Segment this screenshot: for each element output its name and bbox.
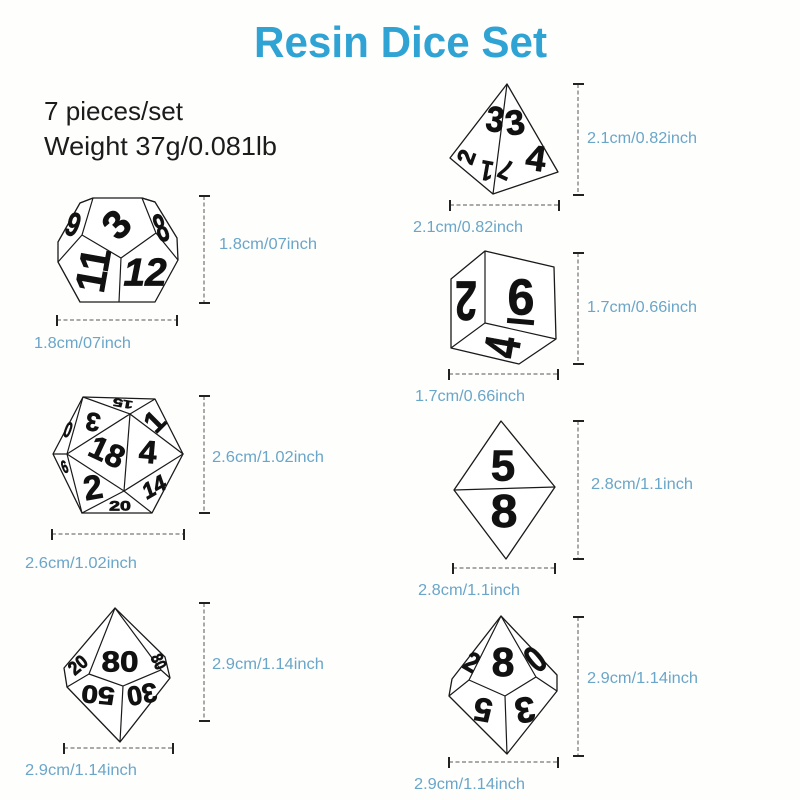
die: d10: 0 [516, 639, 556, 681]
die: d20: 18 [83, 428, 131, 476]
dimension: d10 percentile height [199, 603, 324, 721]
die: d10: 2 [458, 645, 486, 679]
dimension: d10 percentile width [25, 743, 173, 779]
dimension: d8 height [573, 421, 693, 559]
die: d20: 14 [137, 470, 171, 504]
die: d20: 2 [80, 468, 106, 508]
dimension: d20 width: 2.6cm/1.02inch [25, 555, 137, 572]
title: Resin Dice Set [254, 18, 547, 67]
dimension: d10 percentile width: 2.9cm/1.14inch [25, 762, 137, 779]
die: d8: 5 [491, 442, 515, 490]
die: d10 percentile: 80 [101, 646, 139, 678]
dimension: d10 percentile height: 2.9cm/1.14inch [212, 656, 324, 673]
die: d8 [454, 421, 555, 559]
die: d6: 2 [455, 269, 477, 331]
die: d4 [450, 84, 558, 194]
dimension: d10 height [573, 617, 698, 756]
dimension: d10 width [414, 757, 558, 793]
die: d4: 2 [452, 146, 482, 168]
dimension: d20 height: 2.6cm/1.02inch [212, 449, 324, 466]
dimension: d6 height [573, 253, 697, 364]
dimension: d10 width: 2.9cm/1.14inch [414, 776, 525, 793]
dimension: d8 width: 2.8cm/1.1inch [418, 582, 520, 599]
die: d12: 8 [148, 205, 174, 251]
dimension: d12 width [34, 315, 177, 352]
die: d6: 6 [508, 268, 534, 326]
die: d10 percentile: 20 [64, 651, 92, 679]
dimension: d12 height: 1.8cm/07inch [219, 236, 317, 253]
set info text [44, 96, 277, 161]
dimension: d12 width: 1.8cm/07inch [34, 335, 131, 352]
die: d20: 20 [109, 498, 131, 514]
dimension: d6 width: 1.7cm/0.66inch [415, 388, 525, 405]
die: d4: 3 [483, 99, 507, 141]
die: d12: 9 [60, 205, 86, 245]
dimension: d12 height [199, 196, 317, 303]
die: d4: 7 [494, 152, 518, 186]
die: d10: 5 [471, 690, 495, 730]
die: d20: 1 [137, 404, 173, 440]
die: d20: 15 [112, 395, 134, 411]
die: d12: 12 [123, 252, 167, 294]
dimension: d20 width [25, 529, 184, 572]
die: d20: 3 [83, 406, 103, 438]
dimension: d6 width [415, 369, 558, 405]
die: d10 percentile: 80 [146, 651, 170, 673]
die: d20 [53, 395, 183, 514]
dimension: d20 height [199, 396, 324, 513]
die: d10 percentile: 50 [80, 680, 116, 710]
die: d8: 8 [491, 485, 517, 537]
die: d6: 4 [474, 332, 532, 362]
dimension: d8 width [418, 563, 555, 599]
die: d10 percentile [64, 608, 170, 742]
dimension: d8 height: 2.8cm/1.1inch [591, 476, 693, 493]
dimension: d4 height: 2.1cm/0.82inch [587, 130, 697, 147]
die: d4: 1 [478, 154, 496, 186]
die: d12: 11 [66, 244, 120, 296]
die: d4: 3 [503, 102, 527, 144]
die: d6 [451, 251, 556, 364]
die: d12: 3 [94, 202, 140, 248]
dimension: d4 width [413, 200, 559, 236]
dimension: d10 height: 2.9cm/1.14inch [587, 670, 698, 687]
die: d10: 3 [512, 688, 538, 732]
die: d10: 8 [492, 639, 514, 685]
dimension: d4 width: 2.1cm/0.82inch [413, 219, 523, 236]
die: d10 [449, 616, 557, 754]
dimension: d6 height: 1.7cm/0.66inch [587, 299, 697, 316]
die: d4: 4 [523, 136, 549, 180]
die: d20: 0 [60, 417, 76, 443]
set info text: 7 pieces/set [44, 96, 184, 126]
die: d12 [58, 198, 178, 302]
die: d20: 6 [59, 458, 71, 478]
set info text: Weight 37g/0.081lb [44, 131, 277, 161]
dimension: d4 height [573, 84, 697, 195]
die: d10 percentile: 30 [125, 677, 159, 711]
die: d20: 4 [138, 433, 159, 471]
